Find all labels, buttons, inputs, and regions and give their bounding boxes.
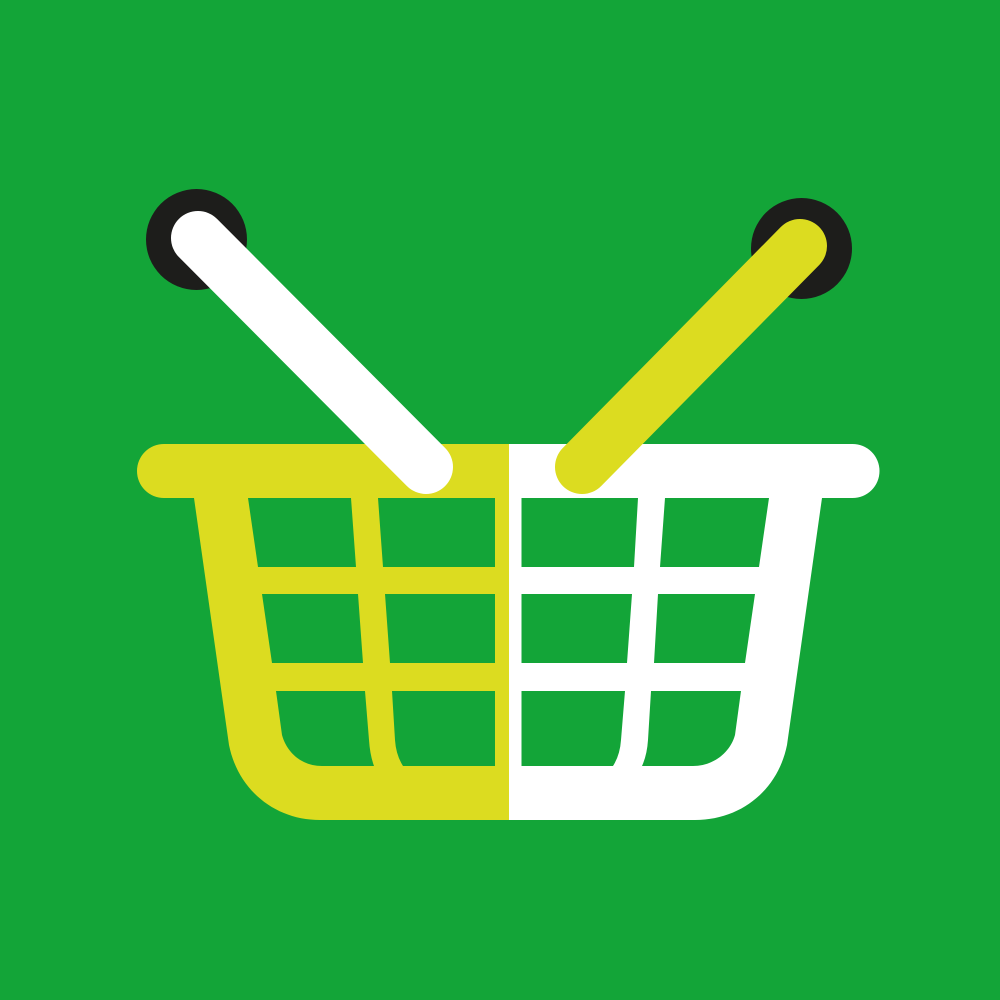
basket: right white half xyxy=(509,444,880,820)
left handle: black pivot and white bar xyxy=(146,189,426,467)
right handle: black pivot and yellow bar xyxy=(582,198,852,467)
basket: left yellow half xyxy=(137,444,509,820)
